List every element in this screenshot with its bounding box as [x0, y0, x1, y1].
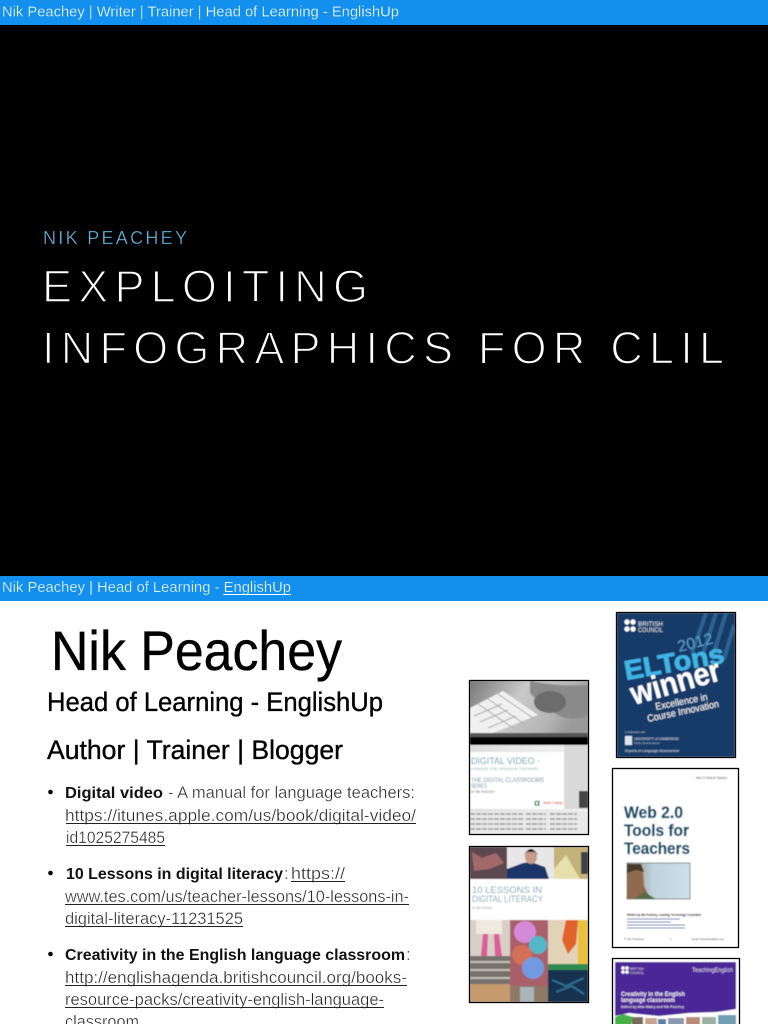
item: creativity: resource-packs/creativity-english-language-	[65, 991, 384, 1009]
award cover: ELTons winner: ELTons	[622, 639, 727, 686]
book cover: creativity in the English language classroom: language classroom	[621, 998, 675, 1004]
book cover: Web 2.0 tools for teachers: Teachers	[624, 840, 690, 858]
book cover: digital video: A MANUAL FOR LANGUAGE TEACHERS	[471, 767, 538, 771]
item: digital video	[48, 784, 416, 847]
item: 10 lessons: https://	[291, 865, 345, 883]
book cover: Web 2.0 tools for teachers: © Nik Peachey	[624, 937, 644, 941]
publications list	[48, 784, 416, 1024]
award cover: ELTons winner: UNIVERSITY of CAMBRIDGE	[634, 736, 679, 741]
author photo	[627, 863, 690, 899]
job title: Head of Learning - EnglishUp	[47, 687, 383, 717]
name heading: Nik Peachey	[51, 619, 342, 682]
award cover: ELTons winner: Course Innovation	[646, 699, 720, 725]
top header bar: Nik Peachey | Writer | Trainer | Head of Learning - EnglishUp	[2, 4, 399, 20]
book cover: Web 2.0 tools for teachers: Web 2.0	[624, 804, 683, 822]
top header bar	[0, 0, 768, 25]
book cover: digital video: Alpha College	[543, 801, 563, 805]
item: creativity	[48, 946, 411, 1024]
book cover: creativity in the English language classroom: Creativity in the English	[621, 992, 685, 998]
book cover: digital video: SERIES	[471, 783, 487, 790]
award cover: ELTons winner: ESOL Examinations	[634, 741, 660, 745]
book cover: 10 lessons in digital literacy: 10 LESSONS IN	[472, 885, 542, 896]
item: digital video: https://itunes.apple.com/us/book/digital-video/	[65, 807, 416, 825]
book cover: 10 lessons in digital literacy: by Nik Peachey	[472, 906, 492, 910]
item: digital video: id1025275485	[66, 829, 165, 847]
roles: Author | Trainer | Blogger	[47, 735, 343, 765]
book cover: Web 2.0 tools for teachers: 1	[670, 937, 672, 941]
book cover: Web 2.0 tools for teachers: Web 2.0 Tools for Teachers	[696, 776, 727, 780]
British Council logo	[624, 619, 663, 634]
award cover: ELTons winner: Experts in Language Assessment	[625, 748, 680, 753]
book cover: Web 2.0 tools for teachers: Tools for	[624, 822, 690, 840]
book cover: 10 lessons in digital literacy: DIGITAL LITERACY	[472, 894, 544, 905]
item: 10 lessons	[48, 865, 409, 928]
book cover: creativity in the English language classroom: BRITISH	[630, 966, 644, 971]
second header bar: Nik Peachey | Head of Learning - EnglishUp	[2, 579, 291, 596]
presenter name: NIK PEACHEY	[43, 228, 187, 248]
award cover: ELTons winner: Excellence in	[654, 692, 709, 713]
award cover: ELTons winner: winner	[625, 652, 724, 712]
book cover: Web 2.0 tools for teachers: Email: nikpeachey@live.com	[692, 937, 724, 941]
black title slide panel	[0, 25, 768, 576]
book cover: creativity in the English language classroom	[612, 958, 740, 1024]
item: 10 lessons: 10 Lessons in digital literacy	[66, 866, 283, 883]
main title: INFOGRAPHICS FOR CLIL	[42, 322, 724, 374]
book cover: Web 2.0 tools for teachers	[612, 768, 738, 948]
book cover: creativity in the English language classroom: Edited by Alan Maley and Nik Peachey	[621, 1005, 685, 1009]
book cover: creativity in the English language classroom: TeachingEnglish	[692, 968, 733, 974]
item: 10 lessons: digital-literacy-11231525	[65, 910, 243, 928]
item: creativity: http://englishagenda.britishcouncil.org/books-	[65, 969, 407, 987]
award cover: ELTons winner: in collaboration with	[625, 730, 645, 734]
item: 10 lessons: www.tes.com/us/teacher-lessons/10-lessons-in-	[64, 888, 409, 906]
second header bar	[0, 576, 768, 601]
item: creativity: Creativity in the English language classroom	[65, 947, 405, 964]
main title: EXPLOITING	[42, 261, 368, 312]
book cover: digital video: α	[534, 798, 541, 809]
book cover: digital video	[470, 680, 588, 834]
item: digital video: - A manual for language teachers:	[168, 784, 415, 802]
main title	[42, 261, 724, 374]
item: creativity: :	[406, 946, 411, 964]
book cover: 10 lessons in digital literacy	[470, 846, 588, 1002]
British Council logo: BRITISH	[638, 621, 663, 628]
book cover: digital video: BY NIK PEACHEY	[471, 790, 496, 794]
item: 10 lessons: :	[284, 865, 289, 883]
item: digital video: Digital video	[65, 785, 163, 802]
award cover: ELTons winner: 2012	[676, 631, 715, 656]
book cover: creativity in the English language classroom: COUNCIL	[630, 970, 645, 975]
book cover: digital video: DIGITAL VIDEO -	[471, 756, 540, 767]
book cover: digital video: THE DIGITAL CLASSROOMS	[471, 777, 544, 784]
book cover: Web 2.0 tools for teachers: Written by Nik Peachey, Learning Technology Consultant	[627, 913, 702, 917]
British Council logo: COUNCIL	[638, 627, 663, 634]
award cover: ELTons winner	[616, 612, 736, 758]
